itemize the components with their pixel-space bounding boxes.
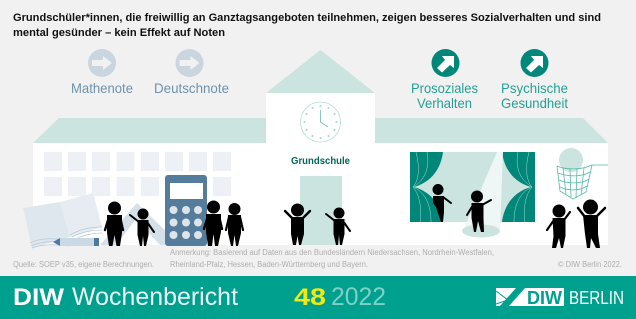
- child 7: [547, 204, 570, 248]
- child behind curtain: [432, 184, 451, 222]
- child 6: [326, 208, 350, 245]
- footer band: Wochenbericht: [72, 283, 238, 311]
- label: Prosoziales Verhalten: Verhalten: [417, 95, 472, 111]
- child 3: [204, 200, 222, 246]
- DIW Berlin logo: [496, 288, 624, 308]
- school building: [33, 50, 608, 245]
- title: Grundschüler*innen, die freiwillig an Ganztagsangeboten teilnehmen, zeigen besseres Sozialverhalten und sind: [13, 12, 601, 24]
- school name: Grundschule: [291, 156, 350, 167]
- label: Psychische Gesundheit: Psychische: [501, 80, 568, 96]
- copyright: © DIW Berlin 2022.: [558, 260, 622, 269]
- title: [13, 12, 601, 39]
- icon: basketball and hoop: [557, 148, 608, 199]
- icon: pencil: [53, 238, 99, 246]
- child 8: [578, 200, 605, 248]
- remark note: [170, 248, 494, 269]
- label: Mathenote: Mathenote: [71, 80, 133, 96]
- issue number: 48: [294, 284, 326, 311]
- windows: [44, 152, 231, 196]
- icon: neutral arrow German: [176, 49, 204, 77]
- icon: up arrow prosocial: [432, 49, 460, 77]
- source note: Quelle: SOEP v35, eigene Berechnungen.: [13, 260, 154, 269]
- label: Prosoziales Verhalten: [411, 80, 478, 111]
- child 1: [105, 202, 123, 246]
- child 2: [130, 208, 154, 246]
- icon: clock: [300, 102, 340, 142]
- left curtain: [410, 152, 443, 222]
- label: Psychische Gesundheit: Gesundheit: [501, 95, 568, 111]
- footer band: [0, 276, 636, 319]
- right curtain: [502, 152, 535, 222]
- DIW Berlin logo: DIW: [527, 288, 562, 308]
- label: Prosoziales Verhalten: Prosoziales: [411, 80, 478, 96]
- remark note: Anmerkung: Basierend auf Daten aus den Bundesländern Niedersachsen, Nordrhein-Westfalen,: [170, 248, 494, 257]
- icon: open book: [23, 193, 102, 248]
- remark note: Rheinland-Pfalz, Hessen, Baden-Württemberg und Bayern.: [170, 260, 368, 269]
- child on stage: [467, 190, 491, 232]
- title: mental gesünder – kein Effekt auf Noten: [13, 27, 225, 39]
- year: 2022: [331, 283, 386, 311]
- child 4: [226, 203, 243, 246]
- stage with curtains: [410, 152, 535, 238]
- child 5: [285, 204, 310, 245]
- spotlight: [463, 152, 503, 231]
- label: Psychische Gesundheit: [501, 80, 568, 111]
- icon: neutral arrow maths: [88, 49, 116, 77]
- DIW Berlin logo: BERLIN: [569, 288, 624, 308]
- publication name: DIW: [13, 284, 64, 311]
- icon: set square: [100, 203, 180, 245]
- children figures: [105, 184, 605, 248]
- icon: up arrow mental health: [520, 49, 548, 77]
- door: [300, 176, 342, 245]
- icon: calculator: [165, 175, 207, 246]
- label: Deutschnote: Deutschnote: [154, 80, 229, 96]
